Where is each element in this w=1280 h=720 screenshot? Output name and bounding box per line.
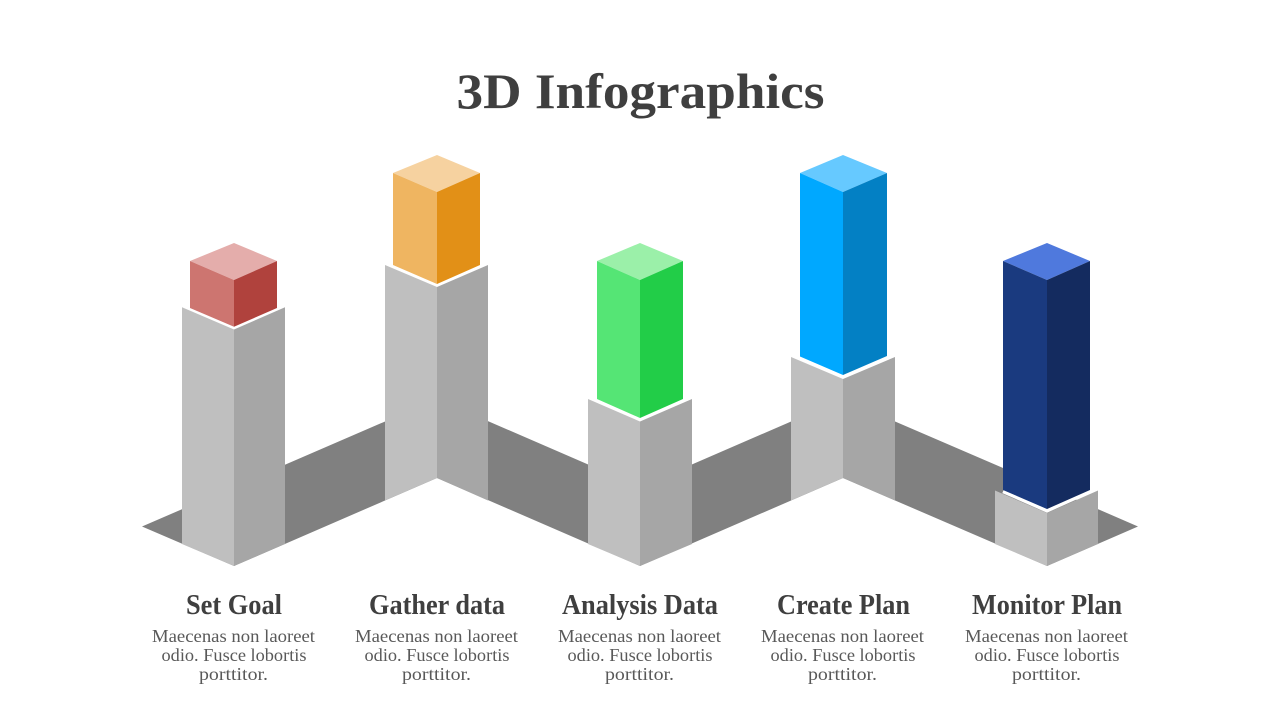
pillar 1 [182,307,285,566]
label 5: porttitor. [1012,664,1081,684]
cube 5 navy [1003,243,1090,509]
label 2 [355,590,518,684]
label 2: odio. Fusce lobortis [364,645,510,665]
label 3: porttitor. [605,664,674,684]
label 2: Maecenas non laoreet [355,626,518,646]
label 4: porttitor. [808,664,877,684]
column 1: Set Goal [152,243,315,684]
label 5: Maecenas non laoreet [965,626,1128,646]
label 5 [965,590,1128,684]
label 5: odio. Fusce lobortis [974,645,1120,665]
label 1: odio. Fusce lobortis [162,645,306,665]
label 4: Maecenas non laoreet [761,626,924,646]
label 1 [152,590,315,684]
label 2: porttitor. [402,664,471,684]
label 4 [761,590,924,684]
cube 1 red [190,243,277,327]
column 4: Create Plan [761,155,924,684]
column 5: Monitor Plan [965,243,1128,684]
label 3: odio. Fusce lobortis [568,645,712,665]
label 1: Set Goal [186,590,282,621]
label 2: Gather data [369,590,505,621]
label 5: Monitor Plan [972,590,1122,621]
label 3 [558,590,721,684]
label 1: Maecenas non laoreet [152,626,315,646]
cube 3 green [597,243,683,418]
label 4: odio. Fusce lobortis [770,645,916,665]
pillar 5 [995,490,1098,566]
pillar 2 [385,265,488,500]
cube 2 orange [393,155,480,284]
pillar 3 [588,399,692,566]
zigzag floor band [142,399,1138,566]
column 3: Analysis Data [558,243,721,684]
label 3: Maecenas non laoreet [558,626,721,646]
column 2: Gather data [355,155,518,684]
pillar 4 [791,357,895,500]
cube 4 blue [800,155,887,375]
label 4: Create Plan [777,590,910,621]
title: 3D Infographics [456,63,824,119]
label 1: porttitor. [199,664,268,684]
label 3: Analysis Data [562,590,718,621]
